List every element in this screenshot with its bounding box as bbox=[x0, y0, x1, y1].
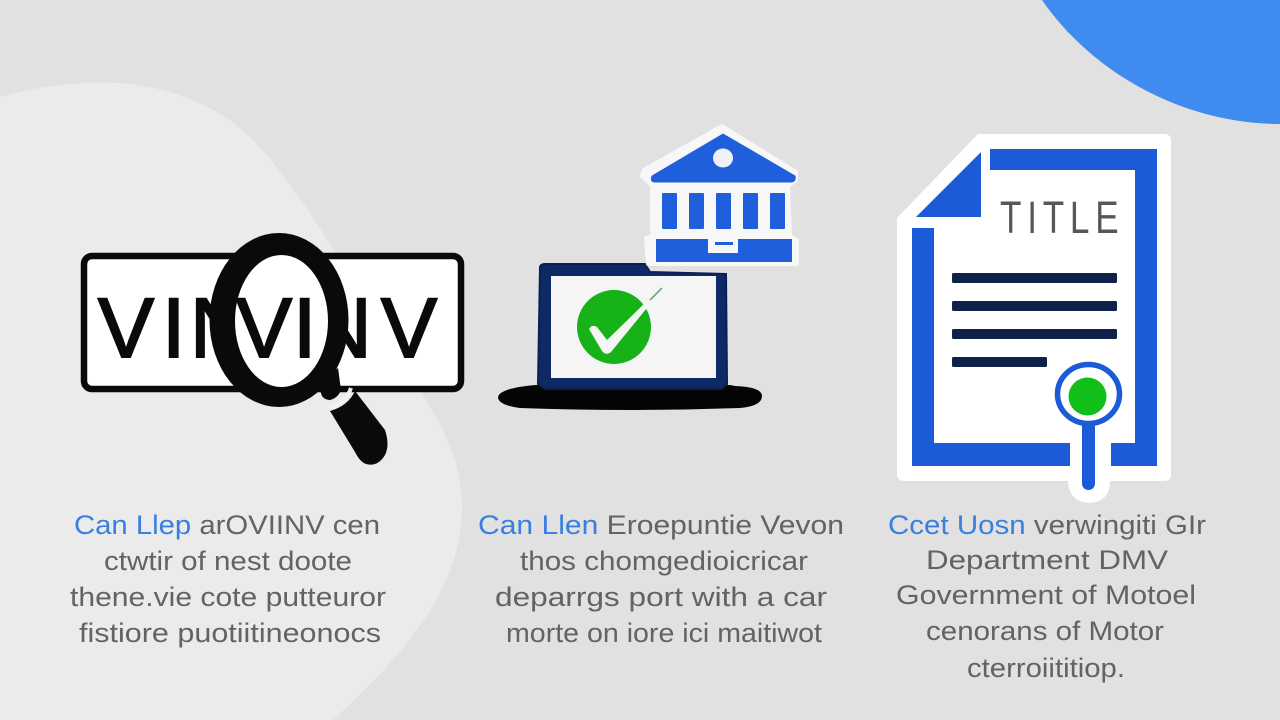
roof bbox=[651, 134, 795, 182]
columns bbox=[662, 193, 677, 229]
icon: government building bbox=[642, 126, 797, 264]
green check badge bbox=[577, 290, 651, 364]
icon: title document bbox=[897, 134, 1171, 503]
magnifier lens bbox=[210, 233, 348, 407]
text block: column 1: Can Llep arOVIINV cen bbox=[74, 510, 380, 540]
icon: VIN magnifier: NV bbox=[311, 281, 437, 375]
seal bbox=[1070, 430, 1111, 470]
text block: column 3 bbox=[888, 510, 1206, 683]
text block: column 3: Government of Motoel bbox=[896, 580, 1196, 610]
text block: column 2 bbox=[478, 510, 844, 648]
text lines bbox=[952, 273, 1117, 283]
text block: column 1: thene.vie cote putteuror bbox=[70, 582, 386, 612]
building backing bbox=[642, 126, 797, 264]
TITLE label: TITLE bbox=[1000, 192, 1124, 243]
text block: column 1: fistiore puotiitineonocs bbox=[79, 618, 381, 648]
magnifier handle bbox=[329, 388, 388, 465]
document backing bbox=[897, 134, 1171, 503]
VIN plate bbox=[84, 256, 461, 389]
plate lettering: VIN bbox=[98, 281, 251, 375]
text block: column 3: Ccet Uosn verwingiti GIr bbox=[888, 510, 1206, 540]
text block: column 1: ctwtir of nest doote bbox=[104, 546, 352, 576]
laptop screen bbox=[538, 264, 727, 389]
text block: column 3: cterroiititiop. bbox=[967, 653, 1125, 683]
document border bbox=[990, 149, 1157, 466]
folded corner bbox=[916, 152, 981, 217]
text block: column 2: morte on iore ici maitiwot bbox=[506, 618, 823, 648]
text block: column 2: Can Llen Eroepuntie Vevon bbox=[478, 510, 844, 540]
magnifier stub bbox=[318, 368, 341, 400]
laptop base bbox=[498, 385, 762, 410]
text block: column 2: thos chomgedioicricar bbox=[520, 546, 808, 576]
text block: column 2: deparrgs port with a car bbox=[495, 582, 827, 612]
background corner: blue circle bbox=[1042, 0, 1280, 124]
base bbox=[656, 239, 792, 262]
text block: column 1 bbox=[70, 510, 386, 648]
text block: column 3: cenorans of Motor bbox=[926, 616, 1164, 646]
text block: column 3: Department DMV bbox=[926, 545, 1168, 575]
icon: VIN magnifier bbox=[84, 233, 461, 465]
lens lettering: VI bbox=[236, 281, 316, 375]
icon: laptop with check bbox=[498, 264, 762, 410]
background blob: light left shape bbox=[0, 83, 462, 720]
